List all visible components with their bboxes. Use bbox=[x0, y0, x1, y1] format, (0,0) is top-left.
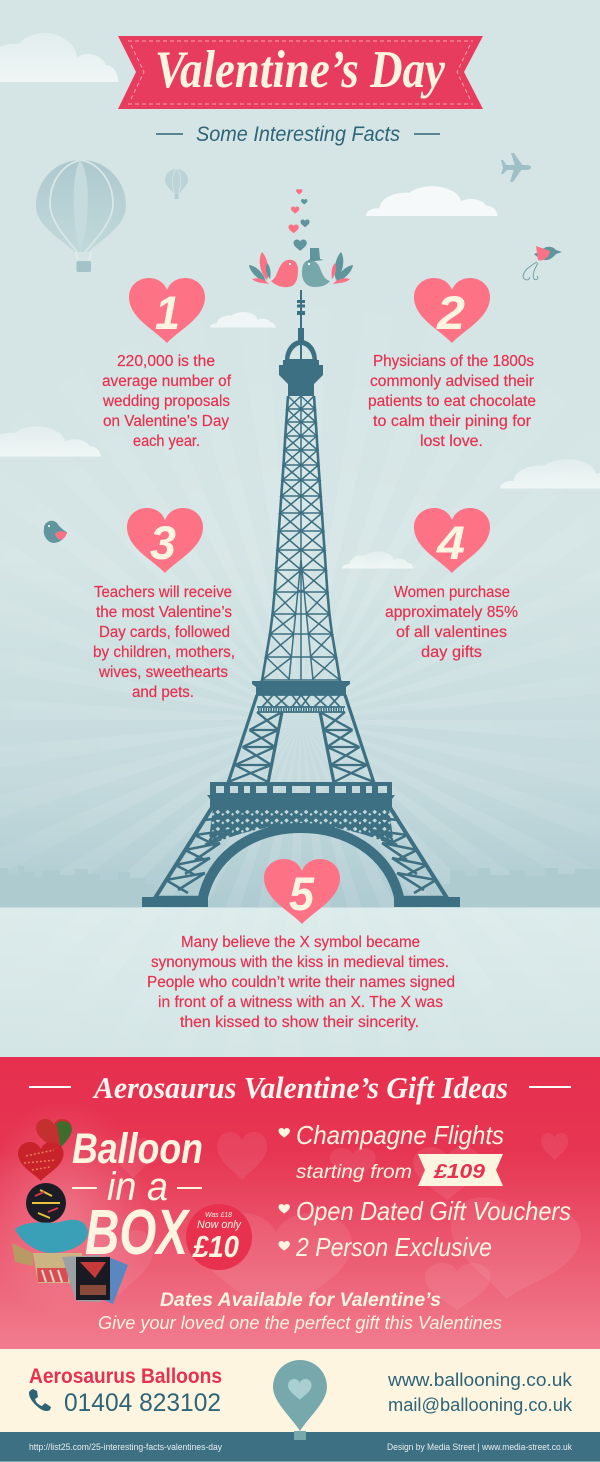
tower feet bbox=[142, 897, 460, 907]
icon: rising hearts bbox=[288, 189, 310, 251]
cloud: upper right bbox=[366, 186, 498, 216]
fact 2 text bbox=[368, 353, 536, 450]
icon: love birds bbox=[249, 248, 353, 287]
fact 3 text: the most Valentine’s bbox=[96, 604, 232, 621]
title: Valentine’s Day bbox=[155, 41, 445, 99]
fact 2 text: lost love. bbox=[420, 433, 483, 450]
phone number: 01404 823102 bbox=[64, 1389, 221, 1417]
fact 4 text: Women purchase bbox=[394, 584, 510, 601]
fact 5 text: then kissed to show their sincerity. bbox=[180, 1014, 419, 1031]
upper tower lattice bbox=[262, 396, 340, 681]
fact 2 text: Physicians of the 1800s bbox=[373, 353, 534, 370]
price badge: £10 bbox=[192, 1229, 239, 1264]
heart badge 3 bbox=[127, 508, 203, 573]
price badge: Was £18 bbox=[205, 1210, 233, 1219]
skyline silhouette right bbox=[445, 868, 600, 907]
Eiffel tower bbox=[142, 290, 460, 907]
balloon box photo bbox=[0, 1100, 150, 1320]
heart badge 4 bbox=[414, 508, 490, 573]
skyline silhouette left bbox=[0, 866, 155, 907]
cloud: beside fact four bbox=[342, 551, 413, 568]
heart badge 3: 3 bbox=[150, 516, 176, 569]
gift heading: Aerosaurus Valentine’s Gift Ideas bbox=[92, 1070, 508, 1105]
gift list bbox=[278, 1120, 571, 1262]
fact 1 text: wedding proposals bbox=[102, 393, 230, 410]
fact 2 text: patients to eat chocolate bbox=[368, 393, 536, 410]
fact 5 text: synonymous with the kiss in medieval times. bbox=[151, 954, 449, 971]
balloon in a box lettering: BOX bbox=[85, 1196, 190, 1268]
source url: http://list25.com/25-interesting-facts-valentines-day bbox=[29, 1442, 222, 1452]
icon: small bird left bbox=[44, 521, 67, 543]
cloud: mid left bbox=[0, 426, 101, 456]
fact 3 text: by children, mothers, bbox=[93, 644, 235, 661]
balloon in a box lettering: in a bbox=[107, 1165, 168, 1209]
fact 1 text: 220,000 is the bbox=[117, 353, 215, 370]
fact 3 text: wives, sweethearts bbox=[98, 664, 228, 681]
web and email: www.ballooning.co.uk bbox=[387, 1370, 573, 1390]
fact 4 bbox=[385, 508, 518, 661]
panel: contact footer bbox=[0, 1349, 600, 1432]
second stage legs bbox=[228, 695, 374, 783]
panel: gift ideas bbox=[0, 1057, 600, 1349]
heart badge 5: 5 bbox=[289, 867, 315, 920]
sky background bbox=[0, 0, 600, 1057]
price tag: £109 bbox=[433, 1161, 486, 1183]
price badge bbox=[186, 1204, 252, 1270]
fact 2 text: commonly advised their bbox=[370, 373, 534, 390]
fact 5 text: in front of a witness with an X. The X was bbox=[158, 994, 443, 1011]
icon: large hot air balloon bbox=[36, 160, 126, 272]
cloud: small beside spire bbox=[210, 312, 276, 328]
title ribbon bbox=[118, 36, 483, 109]
fact 3 text: Teachers will receive bbox=[94, 584, 232, 601]
first platform railing bbox=[207, 782, 395, 808]
icon: map pin balloon bbox=[273, 1360, 327, 1440]
gift footer text: Give your loved one the perfect gift this Valentines bbox=[98, 1313, 502, 1333]
fact 5 text bbox=[147, 934, 455, 1031]
tower dome and top platform bbox=[279, 340, 323, 396]
fact 4 text: day gifts bbox=[421, 644, 482, 661]
web and email bbox=[387, 1370, 573, 1415]
fact 3 bbox=[93, 508, 235, 701]
price tag bbox=[418, 1154, 503, 1186]
balloon in a box lettering bbox=[72, 1125, 203, 1268]
panel: credits bar bbox=[0, 1432, 600, 1462]
subtitle: Some Interesting Facts bbox=[196, 123, 400, 146]
fact 1 text: average number of bbox=[102, 373, 232, 390]
icon: phone bbox=[29, 1389, 51, 1411]
icon: flying bird right bbox=[523, 246, 562, 280]
list item: champagne flights: starting from bbox=[296, 1161, 412, 1183]
second platform bbox=[252, 681, 350, 695]
main arch bbox=[203, 828, 399, 897]
lattice band under first platform bbox=[208, 808, 394, 846]
fact 1 text bbox=[102, 353, 232, 450]
fact 3 text: and pets. bbox=[132, 684, 194, 701]
fact 5 text: Many believe the X symbol became bbox=[181, 934, 420, 951]
lower legs lattice bbox=[155, 806, 447, 898]
second stage lattice band bbox=[257, 695, 345, 712]
sun rays behind tower bbox=[0, 150, 600, 1057]
heart badge 2: 2 bbox=[436, 286, 465, 339]
price badge: Now only bbox=[197, 1219, 242, 1231]
heart badge 1 bbox=[129, 278, 205, 343]
fact 2 text: to calm their pining for bbox=[373, 413, 531, 430]
fact 5 bbox=[147, 859, 455, 1031]
icon: small hot air balloon bbox=[165, 169, 188, 199]
heart badge 1: 1 bbox=[155, 286, 180, 339]
design credit: Design by Media Street | www.media-street.co.uk bbox=[387, 1442, 572, 1452]
fact 4 text: approximately 85% bbox=[385, 604, 518, 621]
company name: Aerosaurus Balloons bbox=[29, 1365, 222, 1388]
icon: airplane bbox=[501, 153, 531, 182]
web and email: mail@ballooning.co.uk bbox=[388, 1395, 573, 1415]
list item: vouchers: Open Dated Gift Vouchers bbox=[296, 1196, 571, 1226]
list item: exclusive: 2 Person Exclusive bbox=[295, 1232, 492, 1262]
fact 1 text: each year. bbox=[133, 433, 200, 450]
fact 1 bbox=[102, 278, 232, 450]
fact 4 text bbox=[385, 584, 518, 661]
heart badge 4: 4 bbox=[436, 516, 465, 569]
fact 3 text: Day cards, followed bbox=[99, 624, 230, 641]
cloud: top left bbox=[0, 33, 118, 82]
tower spire bbox=[297, 290, 305, 342]
list item: champagne flights bbox=[278, 1120, 504, 1183]
fact 2 bbox=[368, 278, 536, 450]
fact 1 text: on Valentine's Day bbox=[103, 413, 229, 430]
gift footer text bbox=[98, 1290, 502, 1333]
list item: champagne flights: Champagne Flights bbox=[296, 1120, 504, 1150]
cloud: mid right bbox=[500, 459, 600, 488]
gift footer text: Dates Available for Valentine’s bbox=[160, 1290, 441, 1311]
fact 4 text: of all valentines bbox=[396, 624, 507, 641]
balloon in a box lettering: Balloon bbox=[72, 1125, 203, 1173]
fact 5 text: People who couldn’t write their names signed bbox=[147, 974, 455, 991]
background faint hearts bbox=[85, 1132, 584, 1317]
heart badge 2 bbox=[414, 278, 490, 343]
heart badge 5 bbox=[264, 859, 340, 924]
fact 3 text bbox=[93, 584, 235, 701]
